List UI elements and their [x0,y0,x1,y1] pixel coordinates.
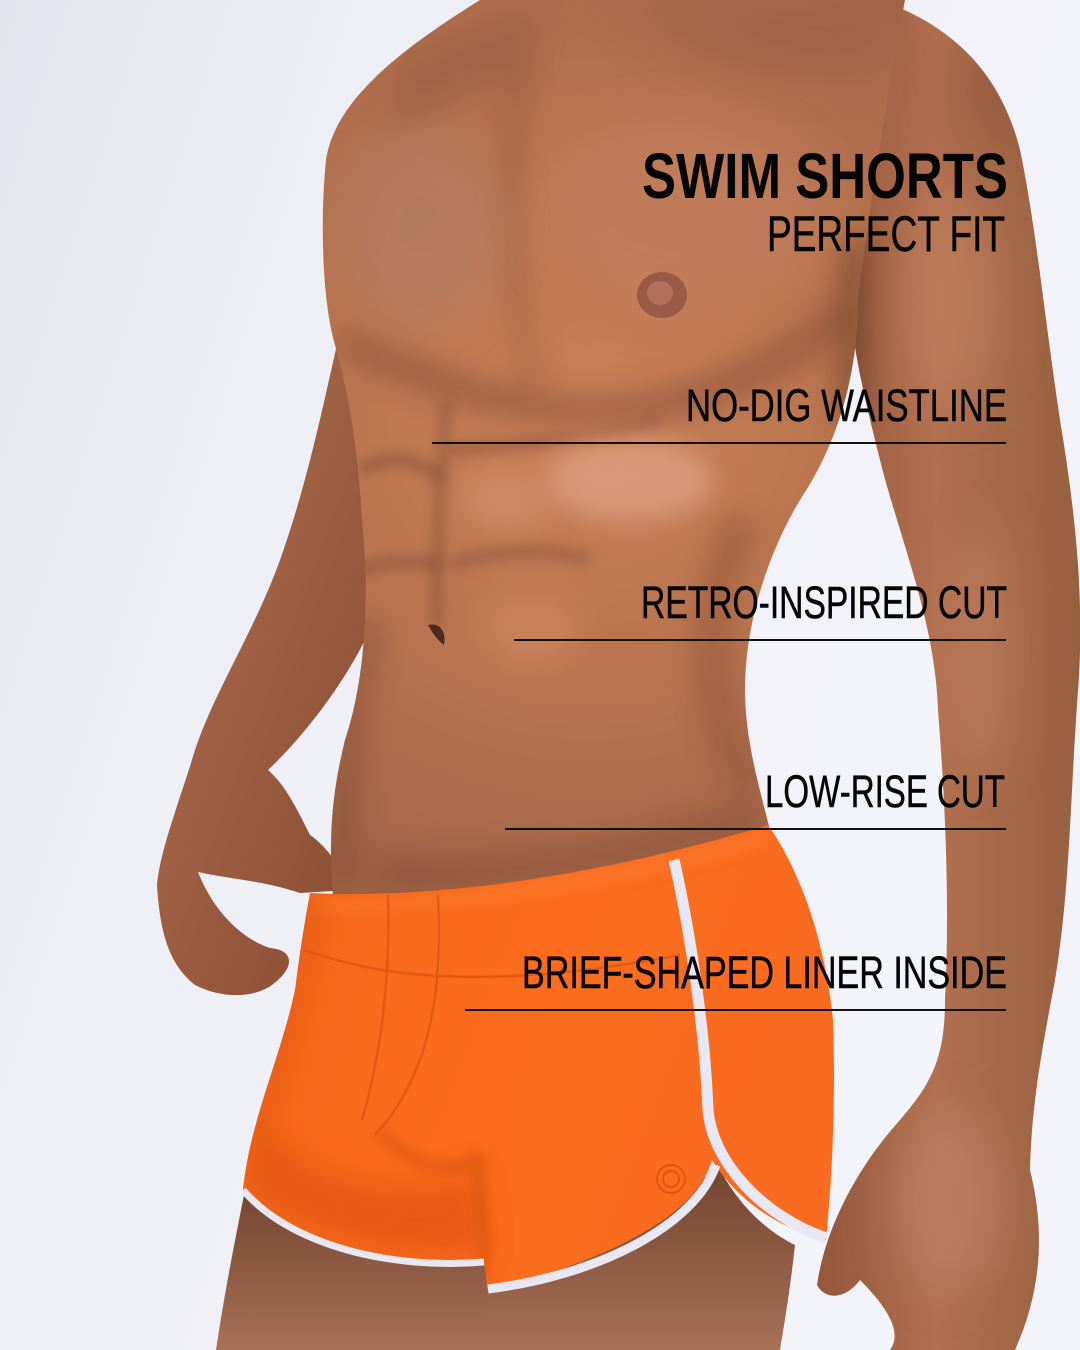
waistband seam and fly stitching [305,895,680,1135]
subheading: perfect fit: PERFECT FIT [767,206,1005,262]
white hem piping left [243,1190,484,1263]
arm: right arm and hand [817,0,1080,1350]
arm: left arm and hand [157,340,400,995]
logo badge [657,1165,685,1193]
muscle shading [338,0,1050,1290]
leg: left thigh [216,1190,490,1350]
swim shorts [240,825,834,1292]
nipple [637,272,687,318]
white side piping [674,860,826,1238]
shorts body [243,825,834,1292]
white hem piping right [488,1165,716,1289]
leg: right thigh [486,1170,795,1350]
navel [428,624,445,645]
torso [323,0,905,950]
shorts shading [240,838,765,1280]
